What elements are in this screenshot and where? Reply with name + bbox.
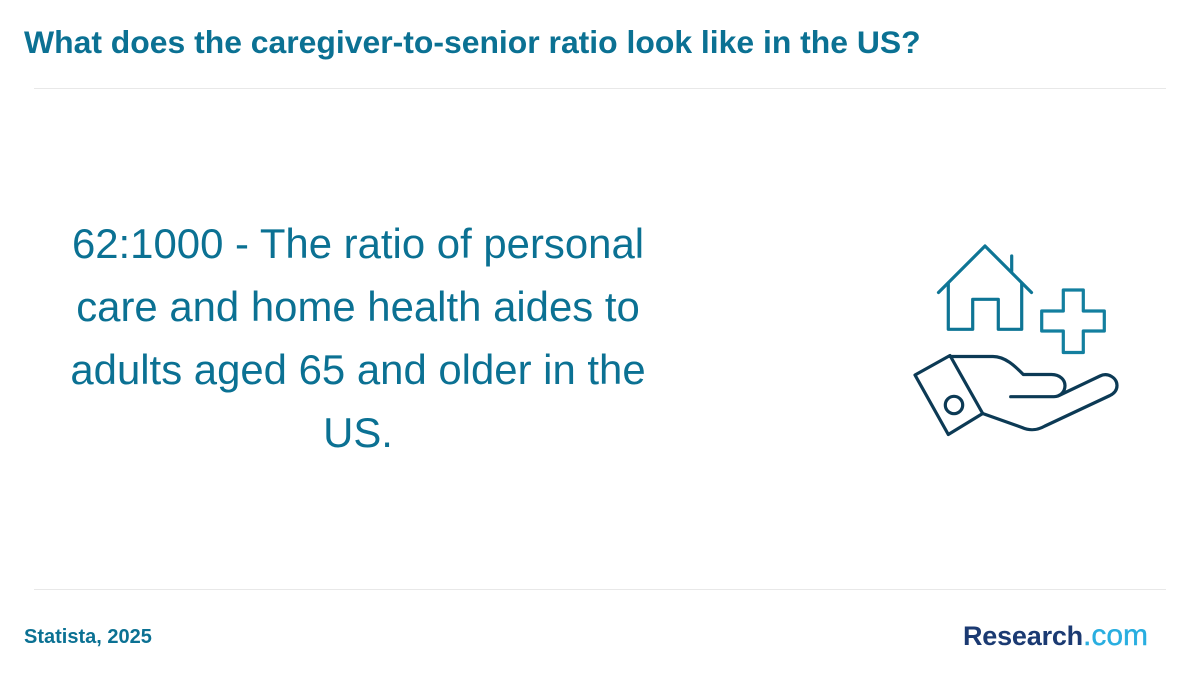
main statistic text: care and home health aides to bbox=[76, 283, 640, 330]
main statistic text: adults aged 65 and older in the bbox=[70, 346, 646, 393]
main statistic text: US. bbox=[323, 409, 393, 456]
main statistic text bbox=[70, 220, 646, 456]
source label: Statista, 2025 bbox=[24, 626, 152, 648]
logo: Research.com: Research.com bbox=[963, 619, 1148, 652]
icon: house bbox=[938, 246, 1032, 329]
icon: hand holding house and medical cross bbox=[913, 244, 1119, 436]
icon: open hand with cuff bbox=[915, 356, 1117, 434]
main statistic text: 62:1000 - The ratio of personal bbox=[72, 220, 644, 267]
title: What does the caregiver-to-senior ratio look like in the US? bbox=[24, 24, 921, 60]
icon: medical cross bbox=[1042, 290, 1104, 352]
